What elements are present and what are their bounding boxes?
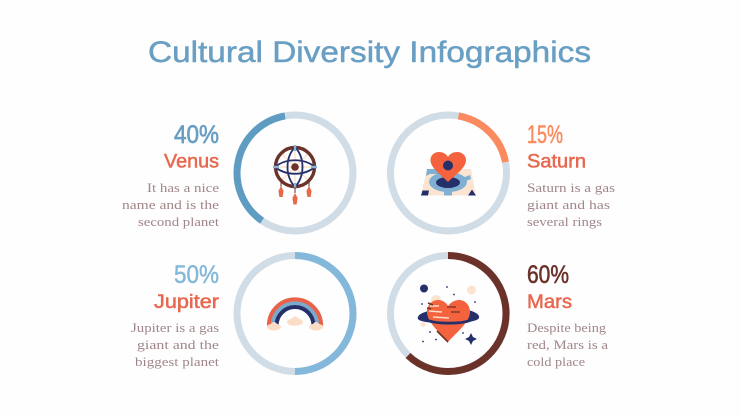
text: Venus description xyxy=(122,181,220,229)
icon: heart planet with ring xyxy=(418,284,479,345)
text: Jupiter description: giant and the xyxy=(137,338,220,352)
text: Venus description: second planet xyxy=(138,215,220,229)
title: Cultural Diversity Infographics xyxy=(148,36,591,69)
percentage: 15%: 15% xyxy=(527,121,563,149)
text: Venus description: It has a nice xyxy=(147,181,220,195)
percentage: 60%: 60% xyxy=(527,261,569,289)
donut chart: Saturn 15% xyxy=(390,115,506,231)
text: Jupiter description: Jupiter is a gas xyxy=(131,321,219,335)
text: Mars description: red, Mars is a xyxy=(527,338,609,352)
text: Saturn description: several rings xyxy=(527,215,602,229)
text: Saturn description xyxy=(527,181,615,229)
heading: Jupiter: Jupiter xyxy=(154,292,220,313)
icon: dreamcatcher xyxy=(273,145,317,204)
panel: Jupiter xyxy=(131,256,353,372)
percentage: 40%: 40% xyxy=(174,121,219,149)
text: Mars description xyxy=(527,321,609,369)
text: Mars description: cold place xyxy=(527,355,586,369)
panel: Mars xyxy=(390,256,609,372)
icon: rainbow xyxy=(267,300,323,330)
text: Venus description: name and is the xyxy=(122,198,220,212)
percentage: 50%: 50% xyxy=(174,261,219,289)
donut chart: Venus 40% xyxy=(237,115,353,231)
heading: Venus: Venus xyxy=(164,152,219,172)
text: Jupiter description: biggest planet xyxy=(135,355,220,369)
panel: Saturn xyxy=(390,115,615,231)
text: Saturn description: giant and has xyxy=(527,198,610,212)
panel: Venus xyxy=(122,115,353,231)
text: Saturn description: Saturn is a gas xyxy=(527,181,615,195)
text: Mars description: Despite being xyxy=(527,321,607,335)
text: Jupiter description xyxy=(131,321,220,369)
icon: map with heart pin xyxy=(421,152,476,196)
donut chart: Jupiter 50% xyxy=(237,256,353,372)
donut chart: Mars 60% xyxy=(390,256,506,372)
heading: Mars: Mars xyxy=(527,292,572,313)
heading: Saturn: Saturn xyxy=(527,152,586,172)
